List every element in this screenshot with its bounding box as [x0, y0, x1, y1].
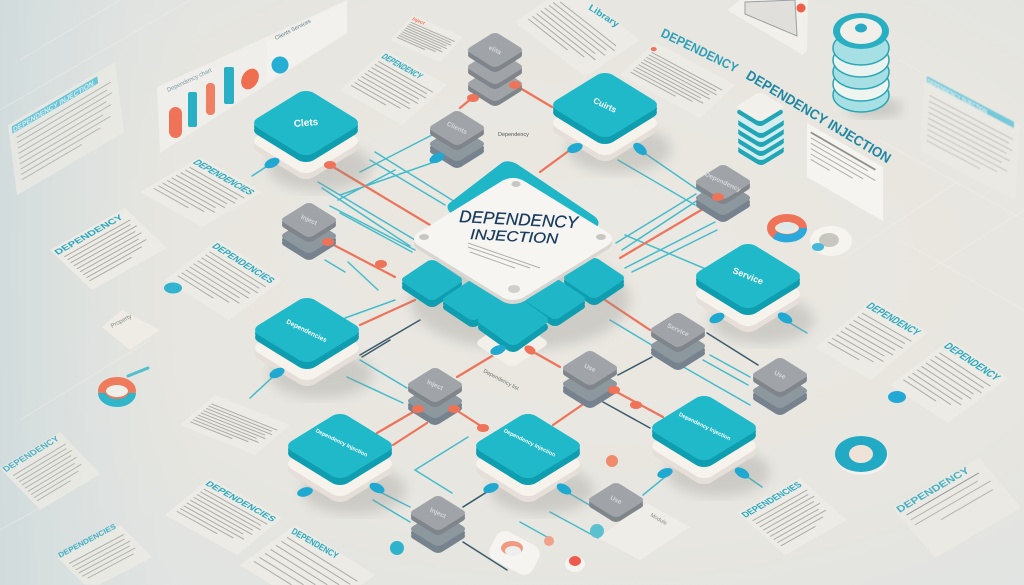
block: Dependencies	[250, 295, 373, 398]
key 3	[475, 300, 551, 354]
panel: document top centre right	[515, 0, 640, 77]
label: Service	[731, 265, 765, 287]
label: Clients	[445, 121, 468, 136]
note text: Property	[110, 314, 133, 330]
chart caption: Dependency chart	[166, 68, 213, 94]
panel: document upper right	[620, 42, 735, 118]
icon: red dot	[796, 4, 806, 12]
heading: DEPENDENCY INJECTION	[927, 78, 987, 116]
icon: white ring	[810, 226, 852, 256]
grey node bottom	[409, 494, 467, 554]
bar: teal 2	[224, 67, 234, 104]
connectors	[250, 85, 807, 570]
heading: dependency injection: DEPENDENCY INJECTION	[743, 67, 894, 166]
heading: DEPENDENCY	[379, 52, 426, 81]
label: small caption: Dependency list	[482, 368, 520, 392]
icon: red button	[565, 556, 585, 572]
heading: DEPENDENCIES	[57, 522, 117, 560]
small dots	[390, 455, 618, 555]
heading: DEPENDENCY	[864, 301, 924, 337]
heading: DEPENDENCIES	[739, 480, 805, 519]
grey node upper left	[428, 110, 486, 170]
icon: database cylinder stack	[833, 13, 903, 118]
panel: document bottom left	[57, 522, 152, 585]
block: Clients	[548, 70, 671, 173]
key 2	[440, 278, 506, 329]
grey node bottom right	[587, 482, 645, 524]
heading: DEPENDENCY	[894, 465, 972, 514]
block: Clets	[249, 88, 372, 191]
screws	[512, 181, 520, 187]
heading: DEPENDENCY	[52, 213, 126, 257]
panel: document mid left	[165, 240, 282, 320]
panel: document left edge	[0, 431, 100, 510]
label: Inject	[429, 507, 448, 521]
label: Cuirts	[592, 95, 618, 115]
icon: teal tag	[888, 391, 906, 403]
title: dependency injection: DEPENDENCY	[459, 207, 580, 232]
grey node top triple	[466, 32, 524, 108]
panel: document dependencies	[165, 478, 282, 555]
icon: stacked slabs	[735, 92, 786, 166]
panel: document lower left	[180, 395, 290, 455]
panel: document top centre small	[390, 15, 463, 62]
block: Service	[691, 241, 814, 344]
panel: top right device card	[727, 0, 808, 55]
heading: DEPENDENCY	[941, 341, 1003, 382]
heading: DEPENDENCY	[290, 526, 340, 561]
icon: teal pill	[164, 282, 182, 294]
teal lines	[250, 135, 807, 538]
label: Use	[609, 495, 623, 506]
icon: red blob	[238, 65, 262, 93]
icon: white device	[486, 527, 543, 578]
base under keys	[474, 318, 550, 368]
panel: document top centre left	[340, 50, 447, 125]
panel: document bottom right	[893, 457, 1021, 558]
block: lower left	[283, 411, 406, 514]
central platform	[399, 158, 630, 368]
key 5	[561, 256, 627, 307]
icon: colour ring	[771, 218, 803, 238]
panel: white card	[807, 123, 883, 221]
dark lines	[360, 320, 758, 570]
grey node right	[649, 312, 707, 372]
grey node mid lower left	[406, 366, 464, 426]
panel: document left with DEPENDENCY title	[50, 208, 167, 290]
panel: document mid lower right	[738, 478, 847, 555]
label: Clets	[293, 117, 319, 130]
icon: teal circle	[272, 56, 288, 74]
note text: Module	[649, 513, 668, 527]
bar: teal 1	[188, 92, 197, 127]
panel: document bottom centre left	[240, 525, 375, 585]
panel: document upper left list	[140, 157, 262, 227]
label: Service	[666, 322, 690, 339]
heading: Inject	[410, 17, 426, 26]
connector pins	[263, 81, 794, 498]
icon: orange ring	[102, 368, 148, 403]
title second line: INJECTION	[470, 227, 559, 248]
caption lines	[468, 243, 540, 268]
heading: DEPENDENCIES	[190, 158, 258, 196]
label: Inject	[300, 214, 319, 228]
bar: red 1	[169, 107, 182, 138]
label: Inject	[426, 379, 445, 393]
rear teal plate	[443, 158, 603, 272]
label: Dependency Injection	[678, 412, 732, 443]
label: Dependencies	[285, 319, 328, 344]
panel: document lower right	[890, 340, 1008, 423]
block: lower right	[647, 393, 770, 496]
key 4	[522, 277, 588, 328]
heading: Library	[587, 2, 621, 29]
label: small caption top: Dependency	[498, 132, 529, 138]
label: Use	[773, 370, 787, 381]
grey node left	[280, 202, 338, 262]
label: elita	[487, 45, 503, 57]
board legend: Clients Services	[274, 18, 312, 42]
red bullet	[650, 46, 658, 52]
panel: small note	[102, 310, 160, 350]
panel: note bottom centre right	[598, 503, 690, 560]
label: Dependency	[704, 171, 742, 194]
heading: DEPENDENCY	[0, 434, 61, 474]
panel: chart board	[157, 0, 347, 153]
grey node upper right	[694, 164, 752, 224]
grey node far right	[751, 356, 809, 416]
panel: document far right	[920, 75, 1020, 200]
label: Dependency Injection	[314, 428, 369, 459]
pin under platform	[489, 343, 507, 357]
white plate side	[408, 178, 618, 308]
red lines	[328, 85, 708, 445]
block: lower centre	[471, 411, 594, 514]
heading: DEPENDENCIES	[209, 241, 278, 285]
heading: dependency upper: DEPENDENCY	[659, 25, 741, 76]
label: Dependency Injection	[502, 428, 557, 459]
heading: top-left document: DEPENDENCY INJECTION	[13, 78, 94, 134]
heading: DEPENDENCIES	[203, 480, 279, 524]
grey node mid lower right	[561, 350, 619, 410]
panel: document right	[815, 300, 928, 380]
label: Use	[583, 363, 597, 374]
text lines	[528, 0, 619, 68]
bar: red 2	[206, 83, 215, 115]
panel: top-left document	[8, 62, 124, 195]
key 1	[399, 258, 465, 309]
icon: teal disc	[835, 436, 888, 475]
